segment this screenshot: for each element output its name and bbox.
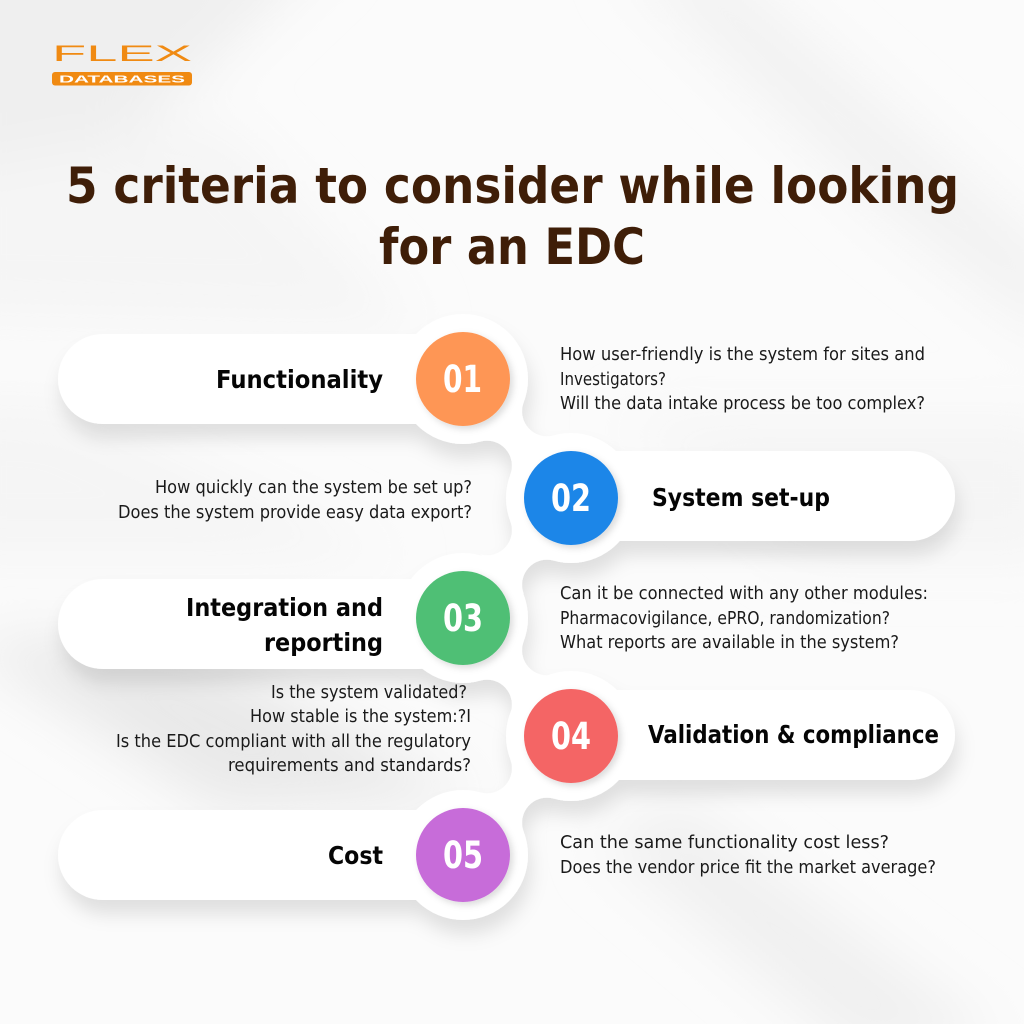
description 04: Is the EDC compliant with all the regulatory: [116, 732, 471, 752]
criterion 01: Functionality: [216, 332, 925, 426]
criterion 05: Cost: [328, 808, 936, 902]
label: System set-up: System set-up: [652, 483, 830, 512]
logo: Flex Databases: FLEX: [52, 41, 193, 66]
description 03: Pharmacovigilance, ePRO, randomization?: [560, 609, 890, 629]
number badge 02: [524, 451, 618, 545]
label: Functionality: Functionality: [216, 365, 383, 394]
white connected card shapes: [58, 314, 955, 920]
description 05: Can the same functionality cost less?: [560, 833, 889, 853]
description 01: [560, 345, 925, 414]
number badge 03: 03: [443, 597, 483, 640]
title: [66, 157, 959, 276]
criterion 02: System set-up: [118, 451, 830, 545]
number badge 01: [416, 332, 510, 426]
label: Cost: Cost: [328, 841, 383, 870]
number badge 04: [524, 689, 618, 783]
number badge 05: [416, 808, 510, 902]
number badge 03: [416, 571, 510, 665]
description 01: Will the data intake process be too complex?: [560, 394, 925, 414]
description 03: [560, 584, 928, 653]
label: Integration and reporting: reporting: [264, 628, 383, 657]
description 04: [116, 683, 471, 776]
number badge 04: 04: [551, 715, 591, 758]
description 05: [560, 833, 936, 878]
criterion 03: Integration and reporting: [186, 571, 928, 665]
description 01: How user-friendly is the system for sites and: [560, 345, 925, 365]
number badge 01: 01: [443, 358, 482, 401]
description 04: How stable is the system:?I: [250, 707, 471, 727]
logo: Flex Databases: DATABASES: [59, 74, 186, 86]
description 04: requirements and standards?: [228, 756, 471, 776]
logo: Flex Databases: [52, 41, 193, 86]
label: Integration and reporting: [186, 593, 383, 657]
number badge 05: 05: [443, 834, 483, 877]
description 02: [118, 478, 472, 523]
description 04: Is the system validated?: [271, 683, 467, 703]
label: Validation & compliance: Validation & compliance: [648, 720, 939, 749]
title: for an EDC: [379, 218, 645, 276]
description 05: Does the vendor price fit the market average?: [560, 858, 936, 878]
label: Integration and reporting: Integration and: [186, 593, 383, 622]
description 03: Can it be connected with any other modules:: [560, 584, 928, 604]
number badge 02: 02: [551, 477, 591, 520]
description 01: Investigators?: [560, 370, 666, 390]
title: 5 criteria to consider while looking: [66, 157, 959, 215]
criterion 04: Validation & compliance: [116, 683, 939, 783]
description 02: Does the system provide easy data export?: [118, 503, 472, 523]
description 03: What reports are available in the system?: [560, 633, 899, 653]
description 02: How quickly can the system be set up?: [155, 478, 472, 498]
